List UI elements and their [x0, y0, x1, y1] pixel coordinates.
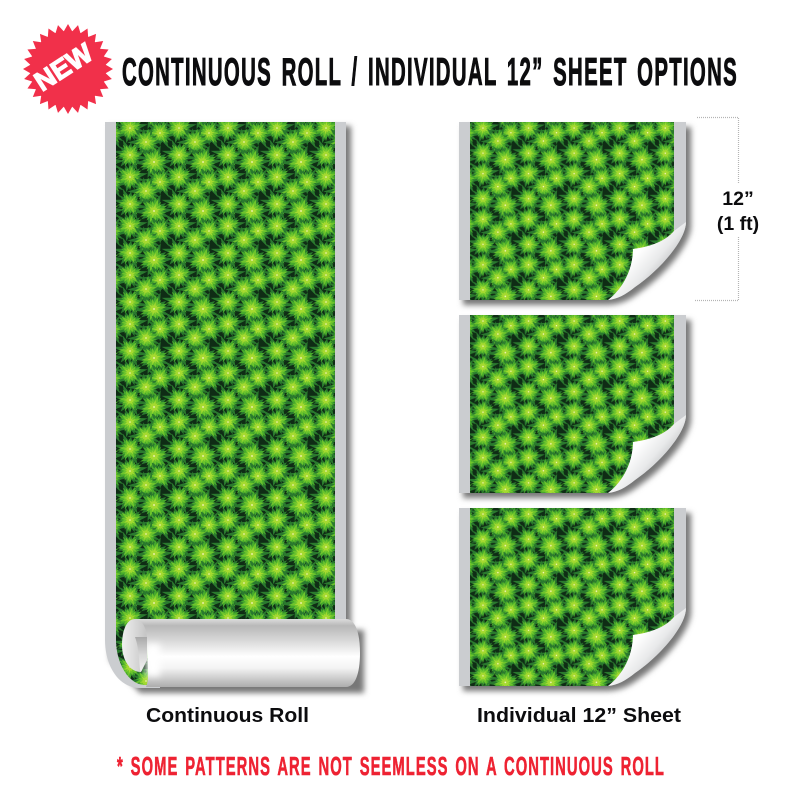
- sheet pattern: [470, 122, 674, 300]
- roll highlight: [146, 644, 160, 676]
- pattern visible under roll end: [116, 630, 150, 685]
- sheet caption: Individual 12” Sheet: [477, 704, 681, 727]
- dimension label: (1 ft): [717, 213, 759, 235]
- sheet pattern: [470, 315, 674, 493]
- roll caption: Continuous Roll: [146, 704, 309, 727]
- panel: sheet 3: [459, 508, 691, 691]
- sheet backing: [459, 508, 686, 686]
- sheet shadow: [463, 127, 691, 305]
- sheet pattern: [470, 508, 674, 686]
- panel: sheet 1: [459, 122, 691, 305]
- roll cylinder: [135, 619, 360, 687]
- roll printed pattern: [116, 122, 335, 642]
- panel: sheet 2: [459, 315, 691, 498]
- page curl: [608, 222, 686, 300]
- roll sheet shadow: [110, 126, 364, 693]
- roll backing strip: [105, 122, 346, 688]
- page curl: [608, 415, 686, 493]
- sheet shadow: [463, 513, 691, 691]
- sheet backing: [459, 122, 686, 300]
- dimension bracket: 12 inch: [695, 118, 738, 300]
- dimension label: [717, 188, 759, 235]
- sheet shadow: [463, 320, 691, 498]
- sheet backing: [459, 315, 686, 493]
- panel: continuous roll: [105, 122, 364, 693]
- roll end cap: [122, 619, 147, 672]
- page curl: [608, 608, 686, 686]
- dimension label: 12”: [722, 188, 754, 210]
- roll inner hole: [135, 637, 147, 672]
- badge label: NEW: [29, 37, 99, 97]
- badge: NEW starburst: [23, 24, 113, 114]
